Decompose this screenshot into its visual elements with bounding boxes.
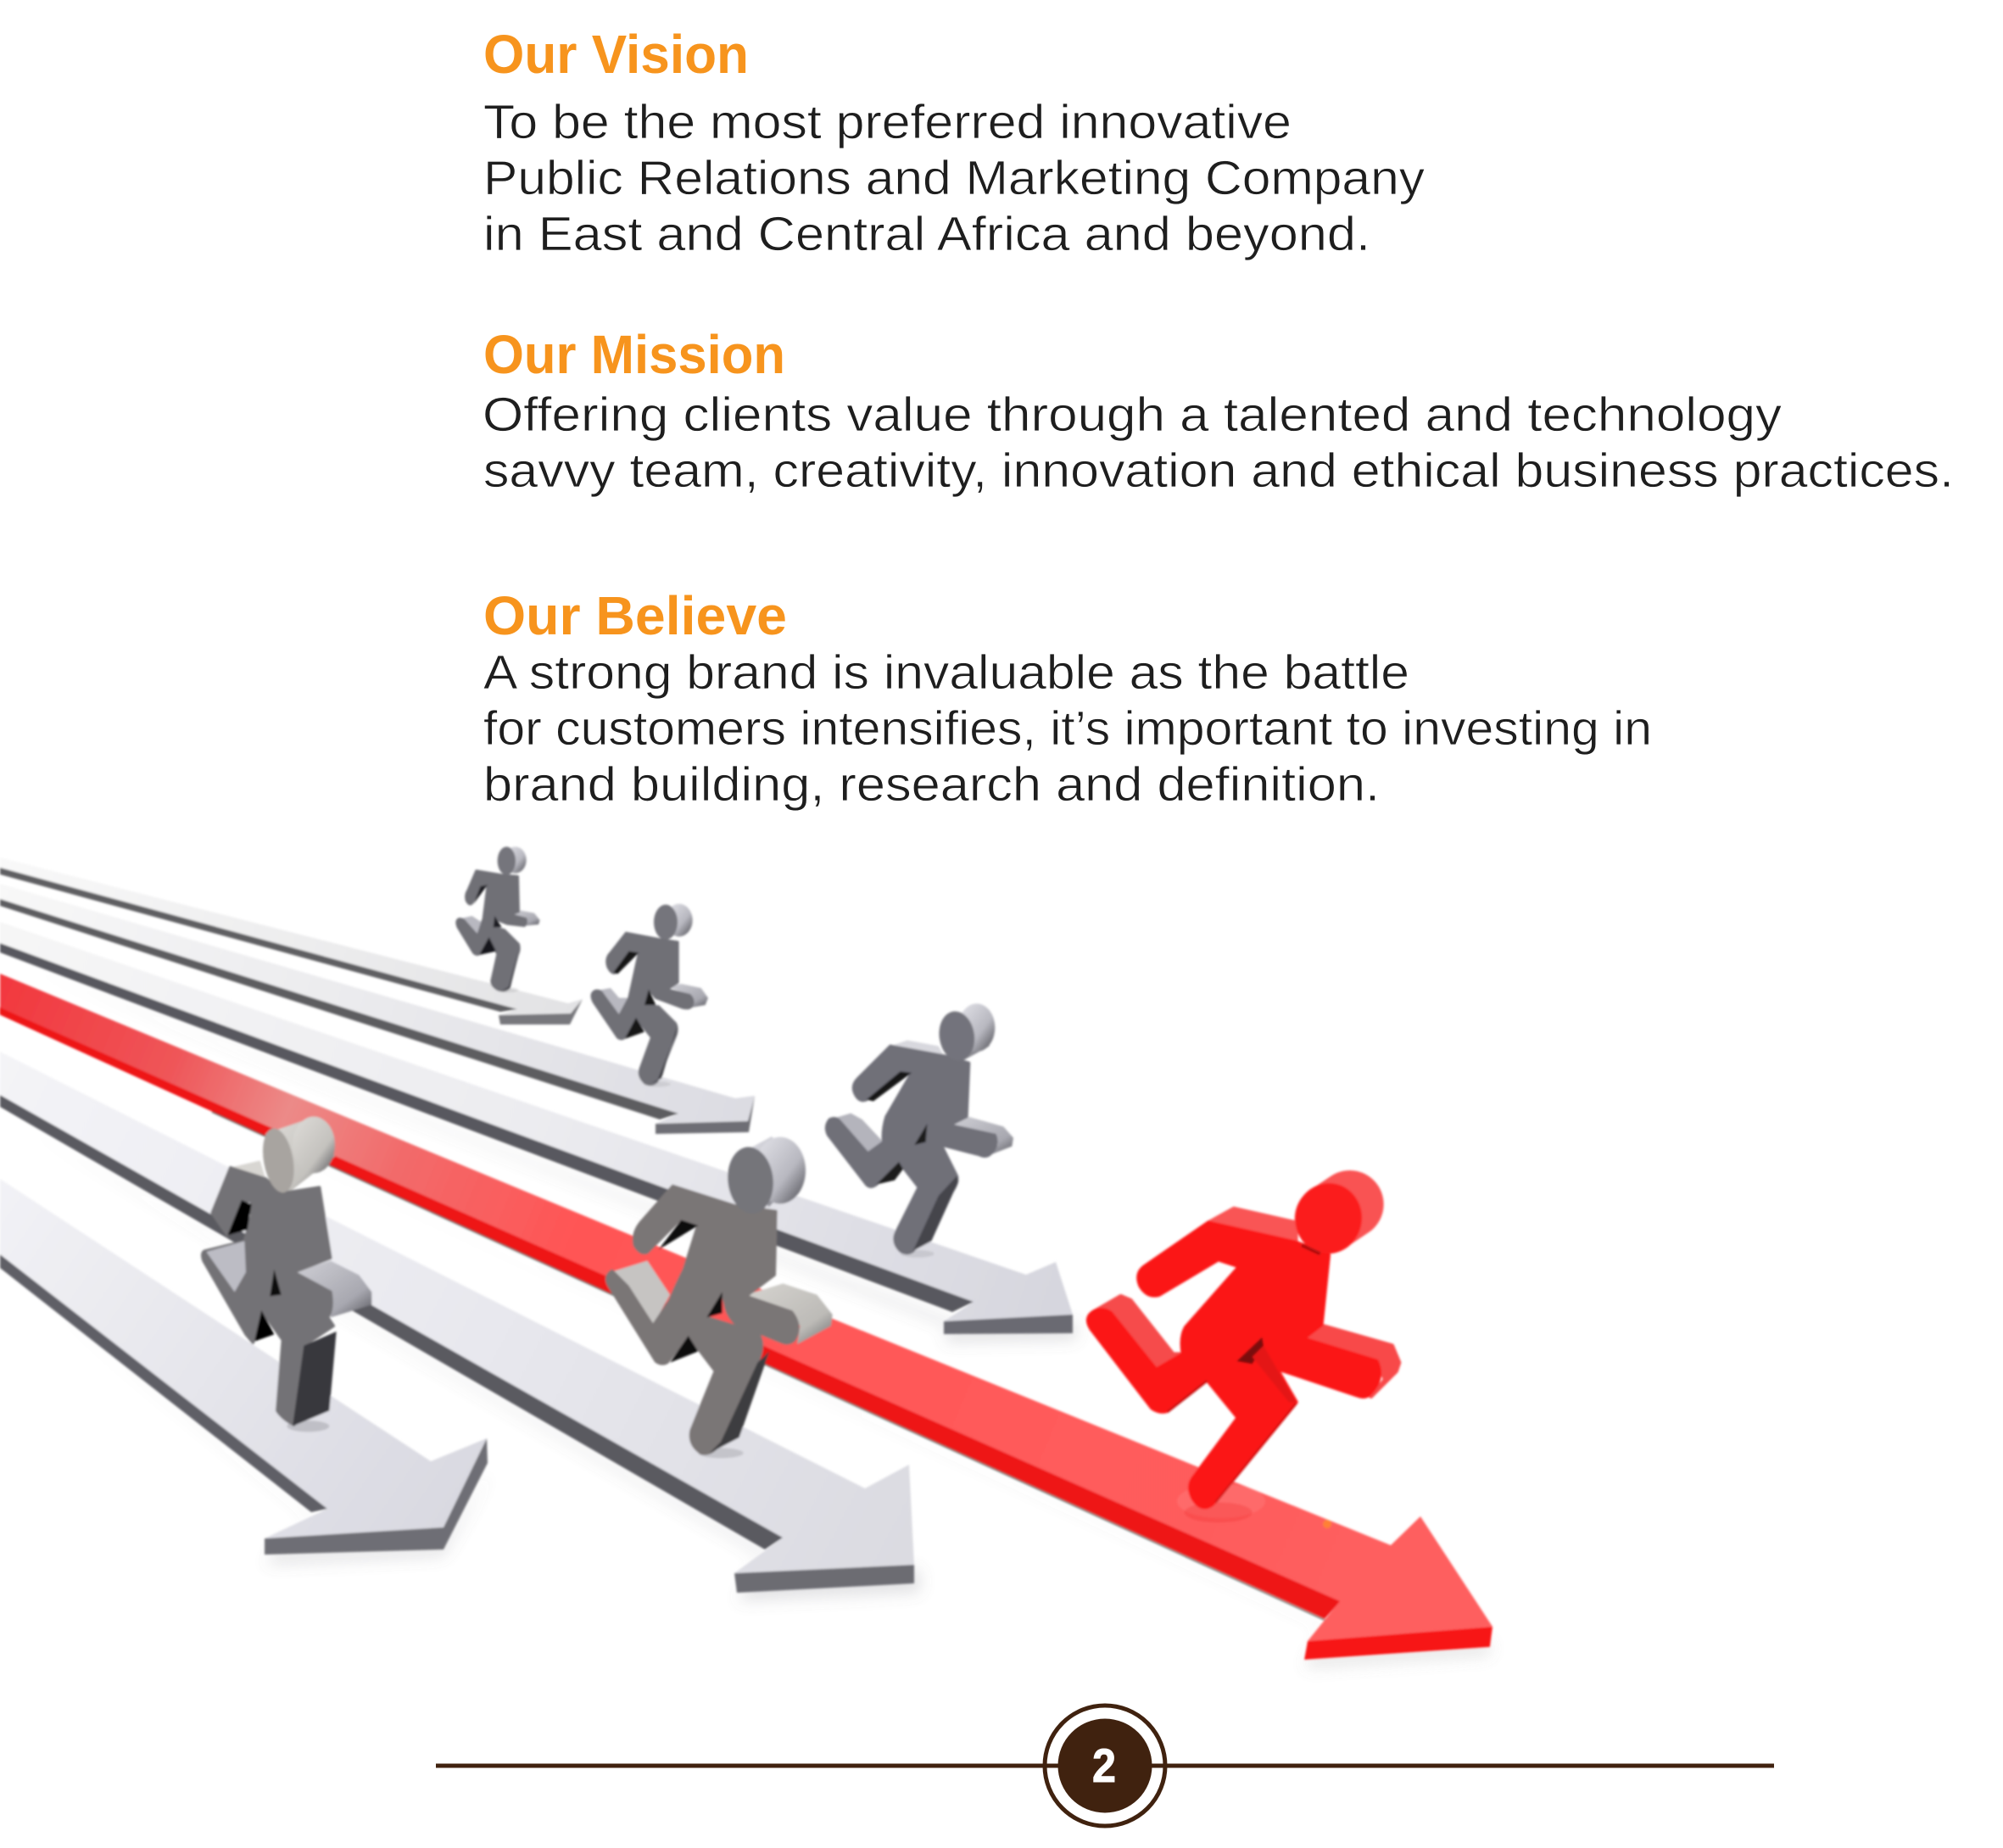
- heading: our vision: Our Vision: [483, 24, 749, 85]
- runner: medium gray second: [592, 904, 708, 1087]
- arrow: gray lane 1: [0, 857, 583, 1024]
- believe statement: for customers intensifies, it’s important to investing in: [483, 701, 1652, 756]
- heading: our mission: Our Mission: [483, 324, 785, 385]
- text block: our vision: [483, 24, 1426, 261]
- vision statement: in East and Central Africa and beyond.: [483, 207, 1370, 261]
- text block: our believe: [483, 585, 1652, 812]
- arrow: red leading lane: [0, 974, 1492, 1660]
- arrow: gray lane 4: [0, 1052, 914, 1593]
- illustration: race of runners on arrows: [0, 846, 1492, 1668]
- believe statement: [483, 645, 1652, 812]
- arrow: gray lane 5: [0, 1179, 488, 1555]
- vision statement: [483, 95, 1426, 261]
- mission statement: [483, 388, 1954, 498]
- runner: gray front centre: [607, 1136, 833, 1458]
- vision statement: To be the most preferred innovative: [483, 95, 1292, 149]
- runner: gray front left: [203, 1117, 371, 1432]
- footer: page number rule: [436, 1764, 1774, 1767]
- arrow: gray lane 2: [0, 884, 755, 1134]
- runner: red leader: [1088, 1179, 1399, 1522]
- believe statement: brand building, research and definition.: [483, 757, 1380, 812]
- arrow: gray lane 3: [0, 922, 1073, 1334]
- page number badge: [1045, 1706, 1165, 1826]
- runner: small gray top: [457, 846, 540, 992]
- page number badge: 2: [1092, 1739, 1116, 1792]
- vision statement: Public Relations and Marketing Company: [483, 151, 1426, 205]
- heading: our believe: Our Believe: [483, 585, 787, 646]
- believe statement: A strong brand is invaluable as the battle: [483, 645, 1409, 700]
- runner: gray third: [827, 1003, 1013, 1258]
- mission statement: Offering clients value through a talented and technology: [483, 388, 1783, 442]
- text block: our mission: [483, 324, 1954, 498]
- mission statement: savvy team, creativity, innovation and ethical business practices.: [483, 444, 1954, 498]
